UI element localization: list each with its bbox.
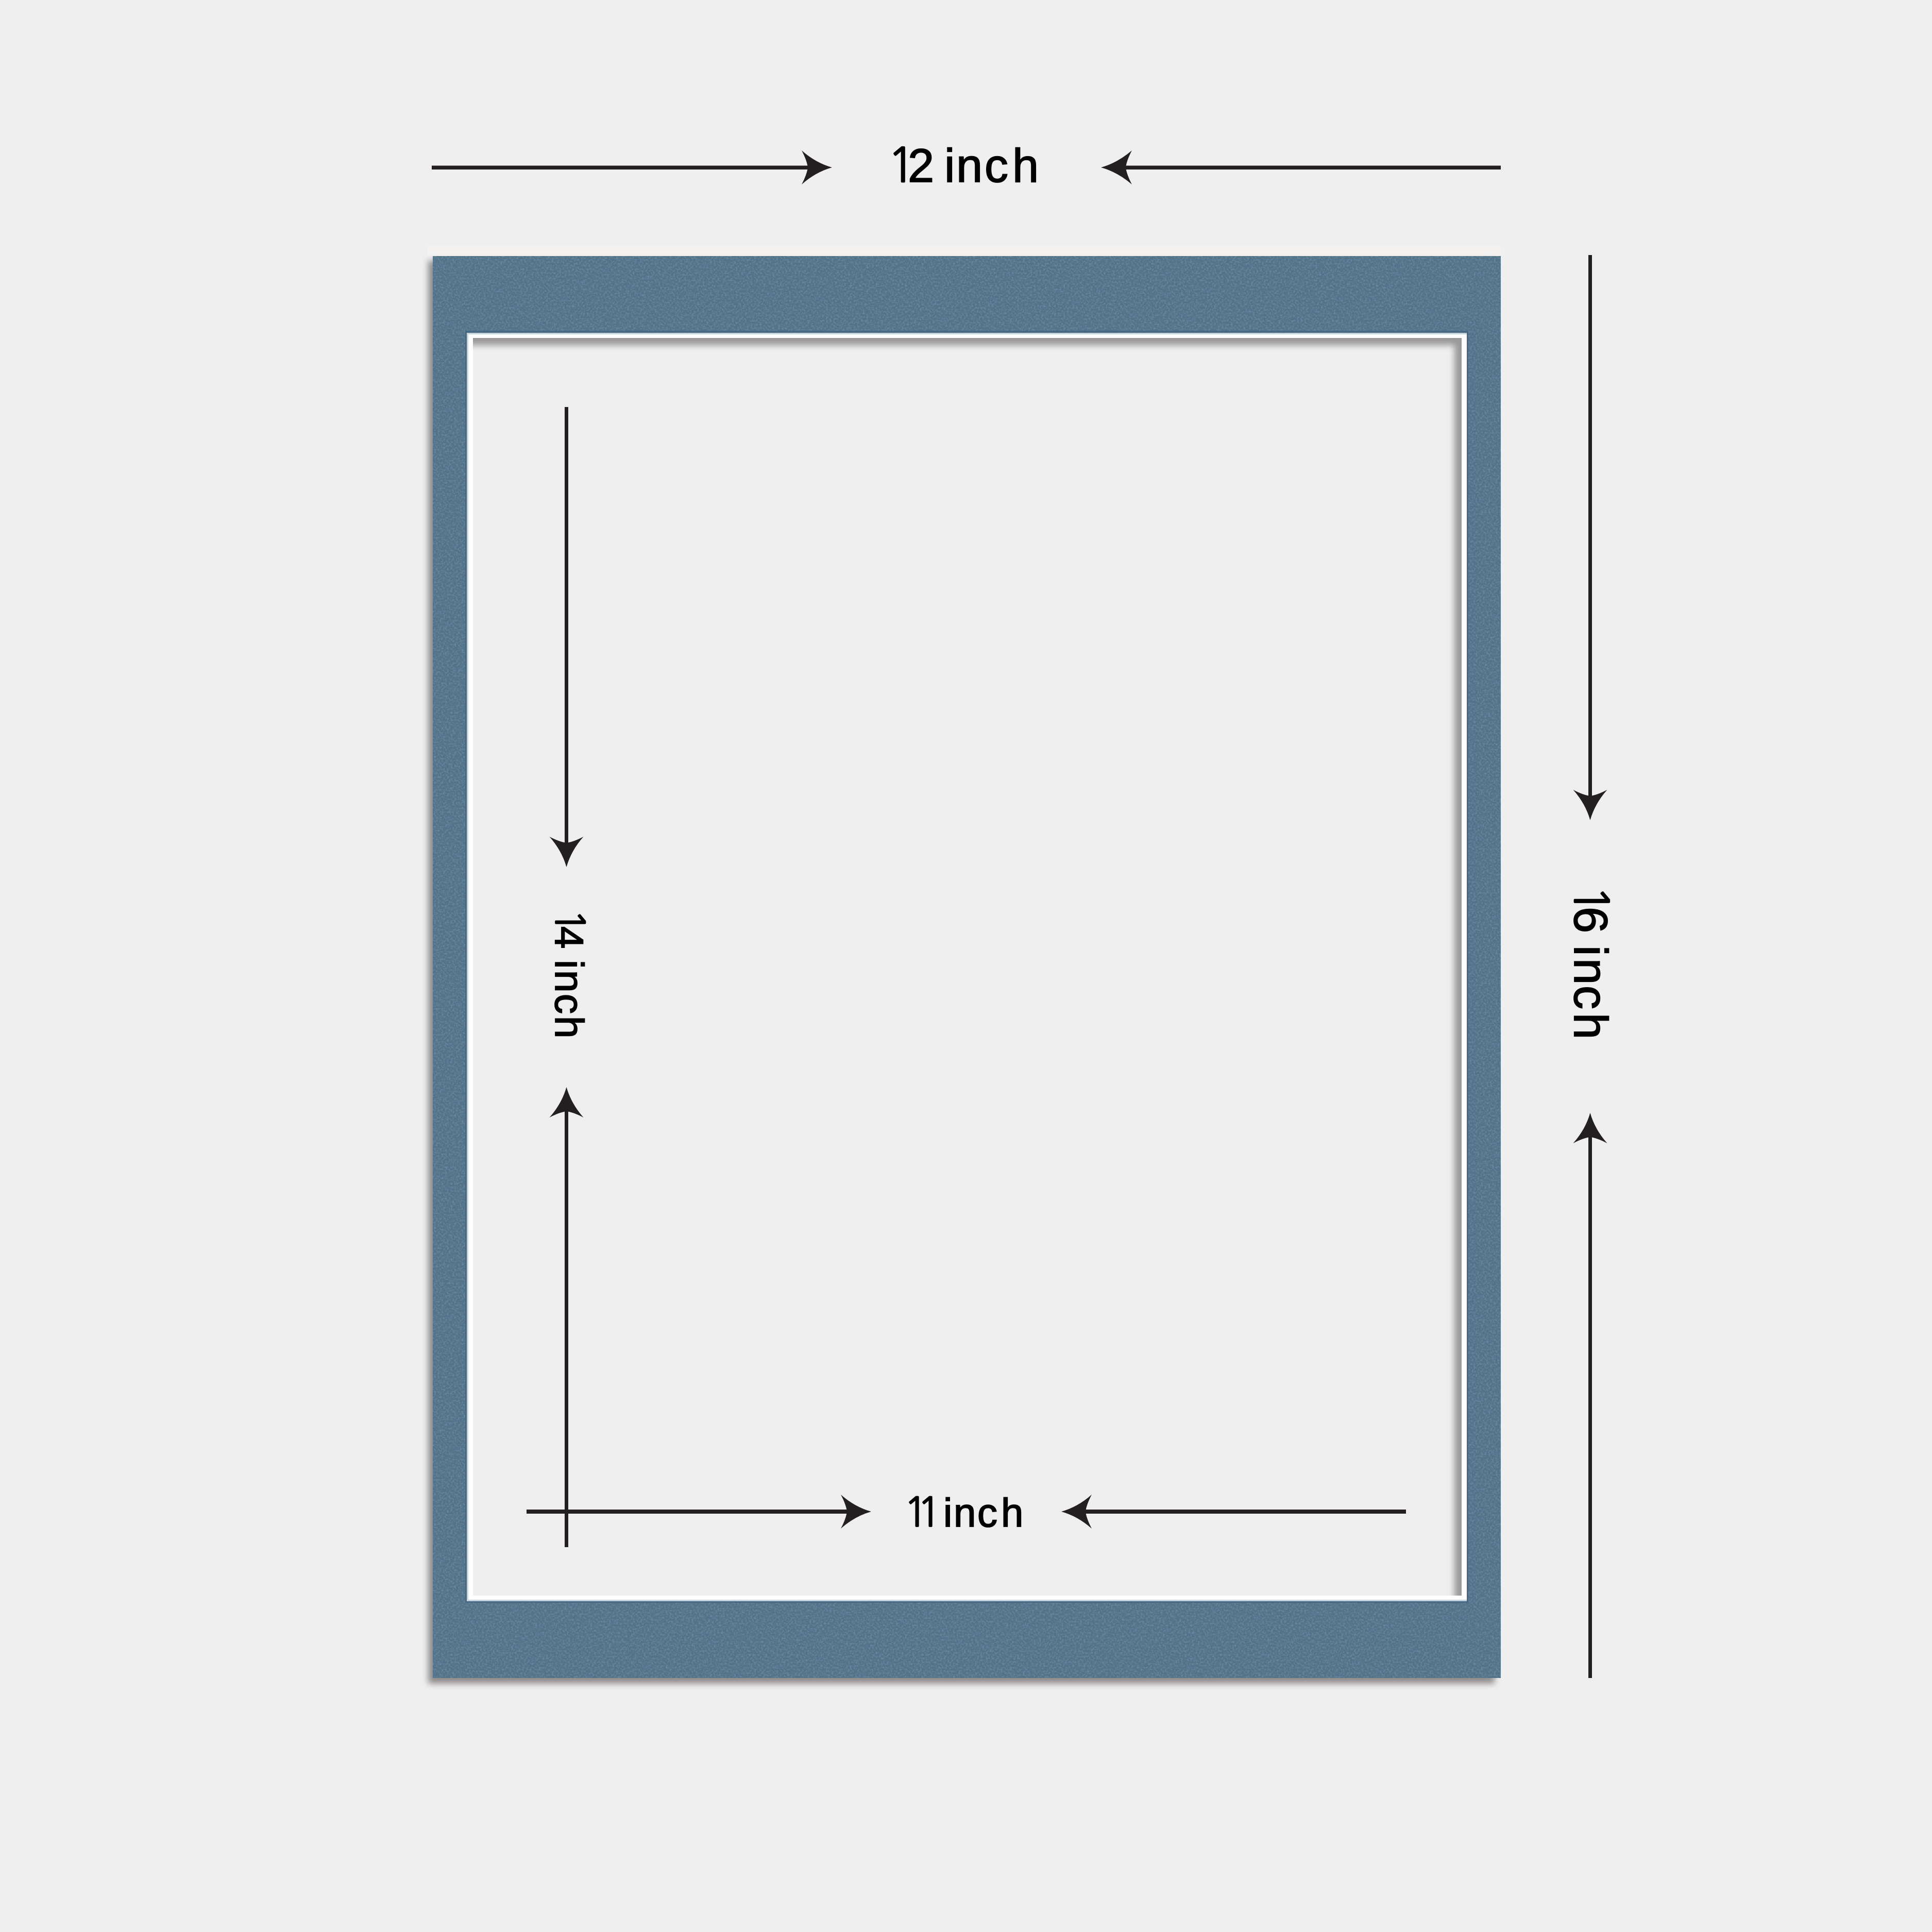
mat top highlight (428, 245, 1501, 256)
mat board (424, 256, 1501, 1688)
window bevel edge (465, 331, 1468, 1603)
arrow: top pointing down (549, 407, 583, 867)
mat surface with window opening (433, 256, 1501, 1678)
arrow: left pointing right (432, 150, 832, 184)
dimension: 12 inch outer width (432, 140, 1501, 192)
label: 12 inch: 1 (887, 142, 916, 189)
bevel tint (467, 333, 1467, 1601)
label: 11 inch: inch (933, 1490, 1023, 1535)
arrow: right pointing left (1061, 1495, 1406, 1529)
label: 16 inch: 6 inch (1564, 907, 1617, 1039)
dimension: 11 inch opening width (527, 1490, 1406, 1535)
label: 16 inch: 1 (1567, 885, 1615, 914)
dimension: 16 inch outer height (1564, 255, 1617, 1678)
arrow: left pointing right (527, 1495, 871, 1529)
label: 14 inch: 4 inch (547, 926, 592, 1038)
label: 12 inch: 2 inch (908, 140, 1039, 192)
arrow: bottom pointing up (1573, 1113, 1607, 1678)
arrow: right pointing left (1101, 150, 1501, 184)
mat drop shadow (428, 261, 1495, 1684)
window opening inner shadow (473, 338, 1462, 1596)
label: 11 inch: 11 (904, 1493, 941, 1533)
window opening (467, 333, 1467, 1601)
white bevel (467, 333, 1467, 1601)
dimension: 14 inch opening height (547, 407, 592, 1547)
arrow: top pointing down (1573, 255, 1607, 820)
label: 14 inch: 1 (549, 909, 589, 933)
arrow: bottom pointing up (549, 1087, 583, 1547)
